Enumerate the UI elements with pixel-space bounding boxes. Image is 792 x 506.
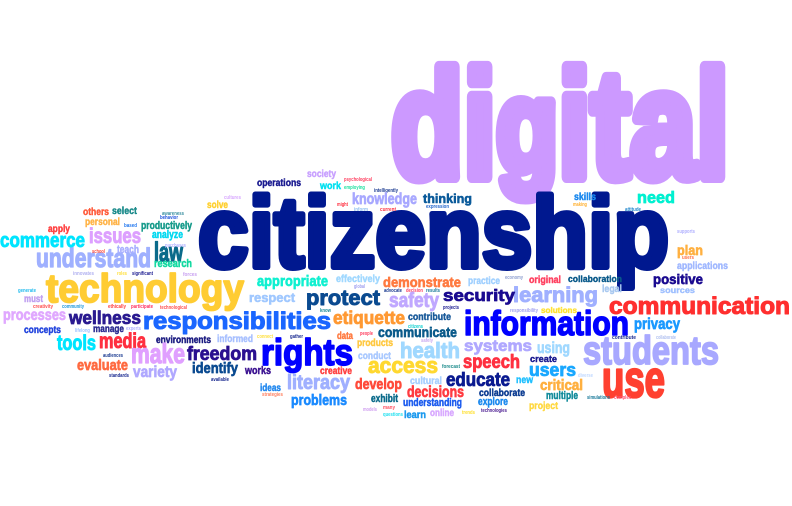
word: media: media: [99, 330, 146, 353]
word: knowledge: knowledge: [352, 191, 417, 208]
word: ethically: ethically: [108, 304, 126, 310]
word: wellness: wellness: [68, 308, 141, 328]
word: access: access: [368, 353, 438, 378]
word: might: might: [337, 202, 348, 208]
word: online: online: [430, 407, 454, 419]
word: school: school: [92, 249, 105, 255]
word: expression: expression: [426, 204, 449, 210]
word: etiquette: etiquette: [333, 308, 405, 328]
word: personal: personal: [85, 217, 120, 228]
word: students: students: [583, 329, 719, 373]
word: connect: connect: [257, 334, 273, 340]
word: based: based: [124, 223, 137, 229]
word: use: use: [602, 351, 665, 409]
word: questions: questions: [383, 412, 403, 418]
word: attitude: attitude: [625, 207, 641, 213]
word: conduct: conduct: [358, 350, 391, 362]
word: forecast: forecast: [442, 364, 460, 370]
word: new: new: [516, 375, 533, 386]
word: plan: plan: [677, 242, 703, 258]
word: security: security: [443, 286, 516, 305]
word: citizenship: citizenship: [198, 177, 669, 289]
word: simulations: simulations: [587, 395, 610, 401]
word: lifelong: lifelong: [75, 328, 90, 334]
word: inform: inform: [354, 207, 368, 213]
word: understanding: understanding: [403, 397, 462, 409]
word: issues: issues: [89, 225, 141, 248]
word: environments: environments: [156, 335, 211, 346]
word: communicate: communicate: [378, 324, 457, 340]
word: legal: legal: [602, 284, 622, 295]
word: privacy: privacy: [634, 316, 680, 333]
word: experts: experts: [126, 326, 141, 332]
word: solutions: solutions: [541, 306, 578, 315]
word: demonstrate: demonstrate: [383, 274, 461, 290]
word: original: original: [529, 275, 561, 286]
word: evaluate: evaluate: [77, 357, 128, 374]
word: complex: complex: [614, 395, 631, 401]
word: solve: solve: [207, 199, 228, 211]
word: speech: speech: [463, 352, 520, 373]
word: many: many: [383, 405, 395, 411]
word: productively: productively: [141, 220, 193, 232]
word: citizens: citizens: [408, 324, 423, 330]
word: develop: develop: [355, 376, 402, 393]
word: appropriate: appropriate: [257, 273, 328, 290]
word: collaborate: collaborate: [479, 387, 525, 399]
word: collaborate small: collaborate: [656, 335, 676, 341]
word: supports: supports: [677, 229, 695, 235]
word: select: select: [112, 206, 138, 217]
word: protect: protect: [306, 287, 380, 310]
word: safety: safety: [389, 290, 440, 312]
word: digital: ital: [558, 40, 729, 210]
word: project: project: [529, 400, 558, 412]
word: systems: systems: [464, 338, 532, 355]
word: innovates: innovates: [73, 271, 94, 277]
word: community: community: [62, 304, 84, 310]
word: freedom: freedom: [187, 344, 257, 365]
word: technological: technological: [160, 305, 188, 311]
word: make: make: [131, 338, 185, 369]
word: others: others: [83, 207, 109, 218]
word: must: must: [24, 294, 44, 305]
word: strategies: strategies: [262, 392, 283, 398]
word: economy: economy: [505, 275, 523, 281]
word: purchases: purchases: [165, 243, 186, 249]
word: learning: learning: [513, 284, 598, 307]
word: digital: g: [496, 53, 558, 199]
word: behavior: behavior: [160, 215, 178, 221]
word: forces: forces: [183, 272, 197, 278]
word: digital: di: [391, 40, 526, 210]
word: users small: users: [682, 255, 694, 261]
word: processes: processes: [3, 307, 66, 324]
word: understand: understand: [36, 243, 151, 273]
word: available: available: [211, 377, 229, 383]
word: thinking: thinking: [423, 191, 472, 206]
word: exhibit: exhibit: [371, 393, 398, 405]
word: models: models: [363, 407, 377, 413]
word: literacy: literacy: [287, 372, 351, 394]
word: apply: apply: [48, 224, 70, 235]
word: results: results: [426, 288, 440, 294]
word: rights: rights: [261, 332, 353, 373]
word: safely: safely: [421, 338, 433, 344]
word: practice: practice: [468, 276, 500, 287]
word: responsibility: responsibility: [510, 308, 538, 314]
word: need: need: [637, 188, 675, 207]
word: effectively: effectively: [336, 273, 380, 285]
word: works: works: [244, 365, 271, 377]
word: technologies: technologies: [481, 408, 507, 414]
word: critical: critical: [540, 377, 583, 394]
word: society: society: [307, 169, 336, 180]
word: respect: respect: [249, 290, 296, 305]
word: contribute: contribute: [408, 312, 451, 323]
word: cultures: cultures: [224, 195, 241, 201]
word: teach: teach: [117, 244, 139, 256]
word: global: global: [354, 284, 365, 290]
word: awareness: awareness: [162, 211, 184, 217]
word: trends: trends: [462, 410, 475, 416]
word: employing: employing: [344, 185, 365, 191]
word: standards: standards: [109, 373, 129, 379]
word: using: using: [537, 340, 570, 357]
word: learn: learn: [404, 409, 426, 421]
word: law: law: [154, 237, 184, 267]
word: information: information: [464, 305, 629, 343]
word: research: research: [154, 258, 192, 270]
word: informed: informed: [217, 334, 253, 345]
word: advocate: advocate: [384, 288, 402, 294]
word: participate: participate: [131, 304, 153, 310]
word: skills: skills: [574, 192, 596, 203]
word: cultural: cultural: [410, 376, 442, 387]
word: current: current: [380, 207, 396, 213]
word: analyze: analyze: [152, 229, 183, 241]
word: problems: problems: [291, 392, 347, 409]
word: create: create: [530, 354, 557, 365]
word: psychological: psychological: [344, 177, 373, 183]
word: manage: manage: [93, 324, 124, 335]
word: decision: decision: [406, 288, 423, 294]
word: ideas: ideas: [260, 383, 281, 394]
word: applications: applications: [677, 261, 728, 272]
word: making: making: [573, 202, 587, 208]
word: diverse: diverse: [578, 373, 593, 379]
word: explore: explore: [478, 396, 508, 408]
word: collaboration: collaboration: [568, 274, 622, 285]
word: know: know: [320, 308, 331, 314]
word: decisions: decisions: [407, 384, 464, 401]
word: communication: communication: [609, 293, 790, 320]
word: responsibilities: responsibilities: [143, 308, 331, 335]
word: multiple: multiple: [546, 390, 578, 402]
word: significant: significant: [132, 271, 153, 277]
word: audiences: audiences: [103, 353, 123, 359]
word: positive: positive: [653, 271, 703, 287]
word: creative: creative: [320, 366, 352, 377]
word: tools: tools: [57, 332, 96, 355]
word: health: health: [400, 338, 460, 363]
word: operations: operations: [257, 178, 301, 189]
word: projects: projects: [443, 305, 459, 311]
word: educate: educate: [446, 370, 510, 391]
word: creativity: creativity: [33, 304, 53, 310]
word: intelligently: intelligently: [374, 188, 398, 194]
word: sources: sources: [660, 285, 695, 295]
word: concepts: concepts: [24, 325, 61, 336]
word: users: users: [529, 360, 576, 380]
word: gather: gather: [290, 334, 303, 340]
word: technology: technology: [46, 267, 245, 311]
word: commerce: commerce: [0, 230, 85, 252]
word: roles: roles: [117, 271, 127, 277]
word: identify: identify: [192, 360, 239, 377]
word: data: data: [337, 331, 353, 342]
word: people: people: [360, 331, 373, 337]
word: work: work: [319, 181, 341, 192]
word: generate: generate: [18, 288, 36, 294]
word: variety: variety: [133, 364, 177, 381]
word: products: products: [357, 338, 393, 349]
word: contribute small: contribute: [612, 335, 636, 341]
